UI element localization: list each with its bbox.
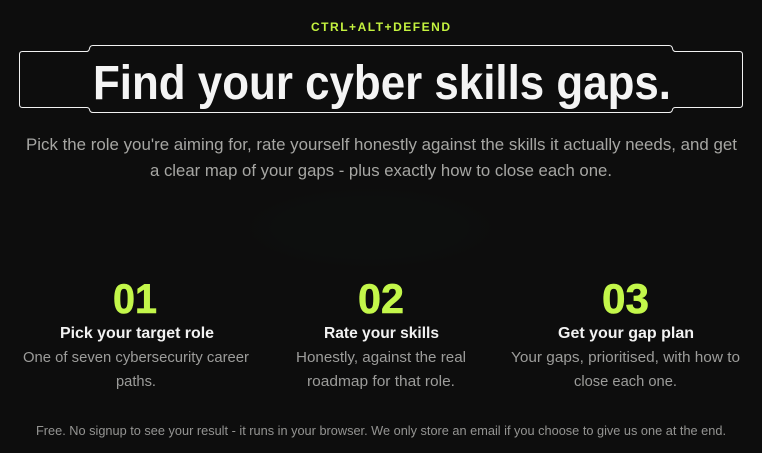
eyebrow label: CTRL+ALT+DEFEND — [311, 20, 450, 34]
step description: One of seven cybersecurity career — [23, 349, 249, 366]
intro text — [26, 136, 737, 180]
step number 01: 01 — [113, 275, 157, 322]
title: Find your cyber skills gaps. — [93, 57, 671, 110]
step description — [296, 349, 466, 390]
step 2: rate your skills — [296, 275, 466, 390]
step heading: Get your gap plan — [558, 325, 694, 342]
intro text: a clear map of your gaps - plus exactly how to close each one. — [150, 162, 612, 180]
step number 02: 02 — [358, 275, 404, 322]
footer note: Free. No signup to see your result - it runs in your browser. We only store an email if you choose to give us one at the end. — [36, 424, 726, 438]
step heading: Rate your skills — [324, 325, 439, 342]
step description: roadmap for that role. — [307, 373, 455, 390]
step description: paths. — [116, 373, 156, 390]
step 1: pick your target role — [23, 275, 249, 390]
title frame — [20, 46, 742, 112]
step 3: get your gap plan — [511, 275, 740, 390]
step number 03: 03 — [602, 275, 649, 322]
step description: close each one. — [574, 373, 677, 390]
step description: Your gaps, prioritised, with how to — [511, 349, 740, 366]
step heading: Pick your target role — [60, 325, 214, 342]
intro text: Pick the role you're aiming for, rate yourself honestly against the skills it actually needs, and get — [26, 136, 737, 154]
step description — [511, 349, 740, 390]
step description: Honestly, against the real — [296, 349, 466, 366]
step description — [23, 349, 249, 390]
